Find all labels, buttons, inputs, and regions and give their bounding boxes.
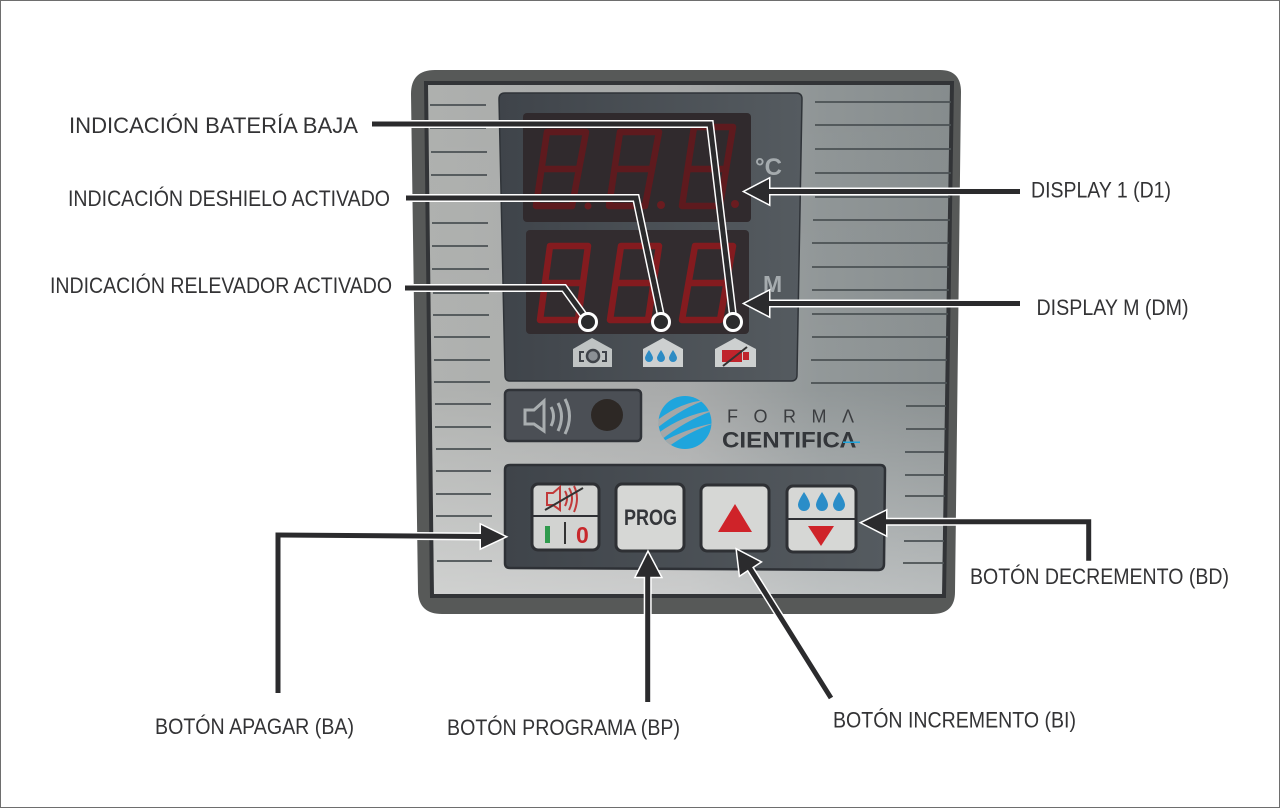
logo accent dash <box>843 442 860 443</box>
icon: relay <box>573 338 612 367</box>
red zero: 0 <box>576 522 589 548</box>
faceplate tick marks <box>430 102 951 563</box>
arrow: button decrement <box>862 511 1091 561</box>
controller device <box>411 70 961 614</box>
icon: drops <box>798 492 845 511</box>
icon: low battery <box>715 338 756 367</box>
label: defrost: INDICACIÓN DESHIELO ACTIVADO <box>68 186 390 211</box>
icon: speaker <box>525 399 570 434</box>
PROG button <box>616 484 684 551</box>
down triangle <box>808 526 834 546</box>
logo <box>655 396 860 452</box>
leader: relay <box>405 288 596 330</box>
display 1 window <box>523 113 751 222</box>
arrow: display M <box>745 291 1020 316</box>
down button <box>787 486 856 552</box>
display M window <box>526 230 749 334</box>
leader: defrost <box>406 198 670 330</box>
label: program: BOTÓN PROGRAMA (BP) <box>447 715 680 740</box>
arrow: button increment <box>737 550 833 699</box>
M label: M <box>763 271 782 297</box>
display 1 decimal points <box>584 200 739 210</box>
label: increment: BOTÓN INCREMENTO (BI) <box>833 708 1076 733</box>
display 1 digits <box>536 127 733 206</box>
label: off: BOTÓN APAGAR (BA) <box>155 714 354 739</box>
leader: low battery <box>372 124 742 330</box>
buzzer panel <box>505 390 641 441</box>
device faceplate <box>426 83 952 596</box>
off button <box>532 484 599 550</box>
label: display M: DISPLAY M (DM) <box>1036 295 1188 320</box>
keypad panel <box>505 465 885 570</box>
logo word FORMA: FORMΛ <box>727 406 854 426</box>
faceplate bottom lightening <box>428 85 950 594</box>
arrow: button off <box>276 525 505 693</box>
divider mark <box>564 522 566 544</box>
icon: muted speaker <box>547 486 577 512</box>
arrow: display 1 <box>745 179 1020 204</box>
display M digits <box>540 246 733 320</box>
PROG button: PROG <box>624 505 677 530</box>
label: display 1: DISPLAY 1 (D1) <box>1031 178 1171 202</box>
buzzer hole <box>591 399 623 431</box>
label: decrement: BOTÓN DECREMENTO (BD) <box>970 564 1229 589</box>
label: relay: INDICACIÓN RELEVADOR ACTIVADO <box>50 273 392 298</box>
logo globe <box>658 396 712 449</box>
green on mark <box>545 526 550 543</box>
label: low battery: INDICACIÓN BATERÍA BAJA <box>69 113 358 138</box>
display panel <box>499 93 802 381</box>
logo word CIENTIFICA: CIENTIFICΛ <box>722 428 856 452</box>
degree C label: °C <box>755 154 782 181</box>
icon: defrost <box>643 338 683 367</box>
up button <box>701 485 769 551</box>
device bezel <box>411 70 961 614</box>
arrow: button program <box>636 553 661 702</box>
